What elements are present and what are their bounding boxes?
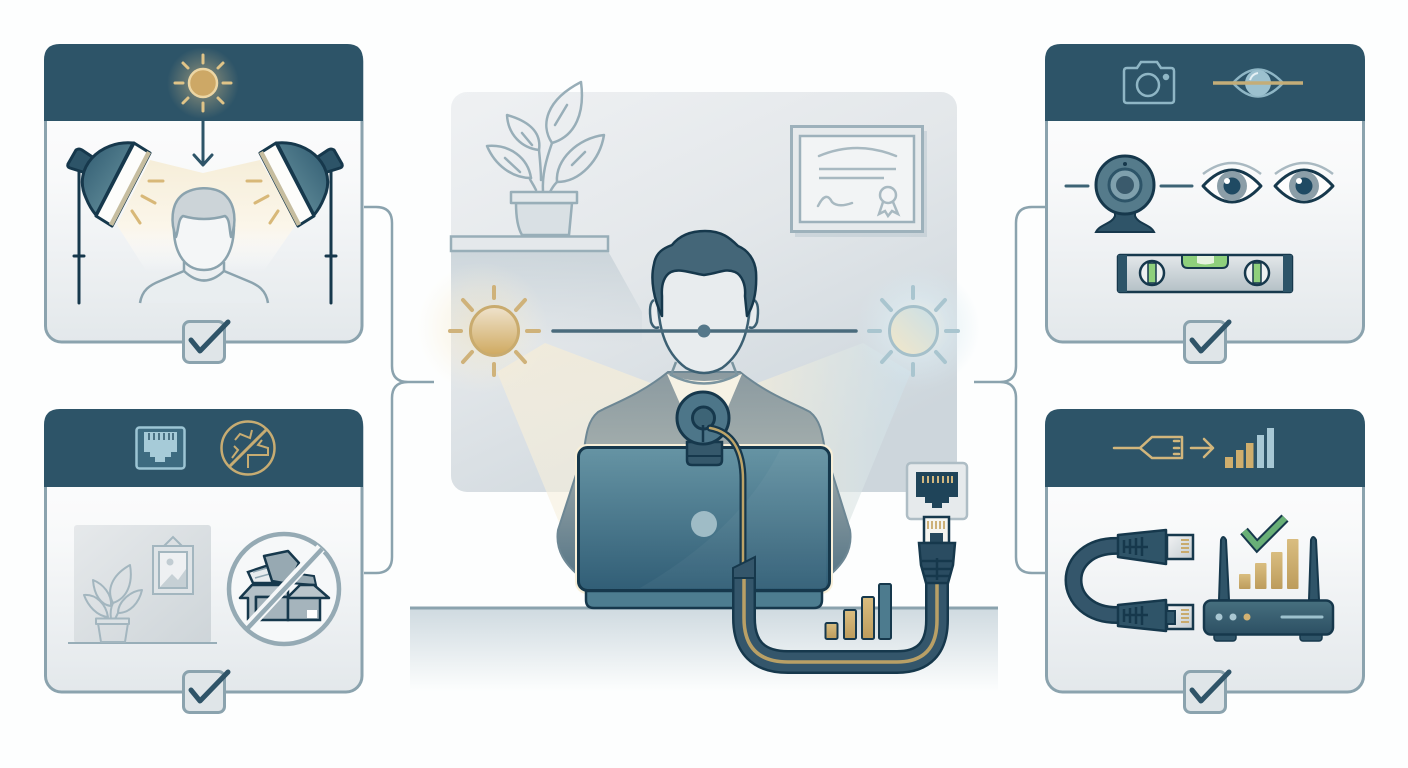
panel: central scene [410, 82, 998, 692]
eye line [553, 329, 856, 333]
icon: left studio lamp [68, 143, 151, 303]
plant on shelf [487, 82, 604, 235]
icon: person outline [140, 188, 268, 303]
card header [44, 44, 363, 121]
right light beam [744, 343, 911, 545]
checkbox [1184, 322, 1229, 362]
desk [410, 606, 998, 692]
neck [671, 362, 737, 384]
suit [557, 372, 851, 578]
softbox light area [117, 160, 297, 272]
left light beam [497, 343, 664, 545]
ethernet wall port [907, 463, 967, 519]
wall [451, 92, 957, 492]
panel: tidy background card [44, 409, 363, 712]
icon: framed picture [153, 537, 193, 594]
shirt collar [667, 374, 742, 445]
card body [46, 411, 362, 692]
cable [710, 428, 937, 662]
card header [44, 409, 363, 487]
card body [46, 46, 362, 342]
shelf shadow [451, 251, 642, 345]
signal bars [826, 584, 891, 639]
icon: small plant [84, 565, 142, 642]
icon: camera [1124, 62, 1174, 103]
connector: right bracket [974, 207, 1045, 573]
face [658, 258, 750, 373]
panel: wired connection card [1045, 409, 1365, 712]
arrow: down [194, 121, 212, 165]
shelf [451, 236, 608, 251]
icon: spirit level [1118, 255, 1292, 292]
icon: router [1204, 537, 1333, 641]
right sun [856, 266, 980, 390]
tidy wall panel [68, 525, 217, 643]
icon: right studio lamp [259, 143, 342, 303]
icon: webcam [1066, 156, 1192, 232]
checkbox [184, 322, 228, 362]
icon: no clutter badge [222, 422, 274, 474]
icon: no clutter box [229, 534, 339, 644]
light rays [132, 181, 278, 223]
icon: eye with level line [1213, 70, 1303, 96]
card body [1046, 46, 1364, 342]
card header [1045, 44, 1365, 121]
connector: left bracket [364, 207, 434, 573]
eye line marker [698, 324, 710, 338]
icon: header signal bars [1225, 428, 1274, 468]
card body [1046, 411, 1364, 692]
icon: right eye [1275, 163, 1333, 202]
ears [650, 300, 758, 328]
icon: signal bars [1239, 539, 1298, 589]
checkbox [184, 672, 228, 712]
icon: ethernet patch cable [1074, 530, 1193, 631]
arrow: header [1191, 439, 1213, 457]
person [557, 231, 851, 578]
icon: green check [1244, 518, 1285, 546]
panel: lighting card [44, 44, 363, 362]
panel: camera at eye level card [1045, 44, 1365, 362]
icon: left eye [1203, 163, 1261, 202]
certificate [792, 126, 927, 237]
icon: header plug [1114, 437, 1182, 458]
left sun [416, 262, 548, 394]
webcam [677, 392, 729, 465]
ethernet plug [919, 517, 955, 583]
hair [652, 231, 756, 316]
icon: network port [136, 428, 184, 468]
laptop [575, 444, 833, 608]
checkbox [1184, 672, 1229, 712]
card header [1045, 409, 1365, 487]
icon: header sun [167, 47, 239, 119]
